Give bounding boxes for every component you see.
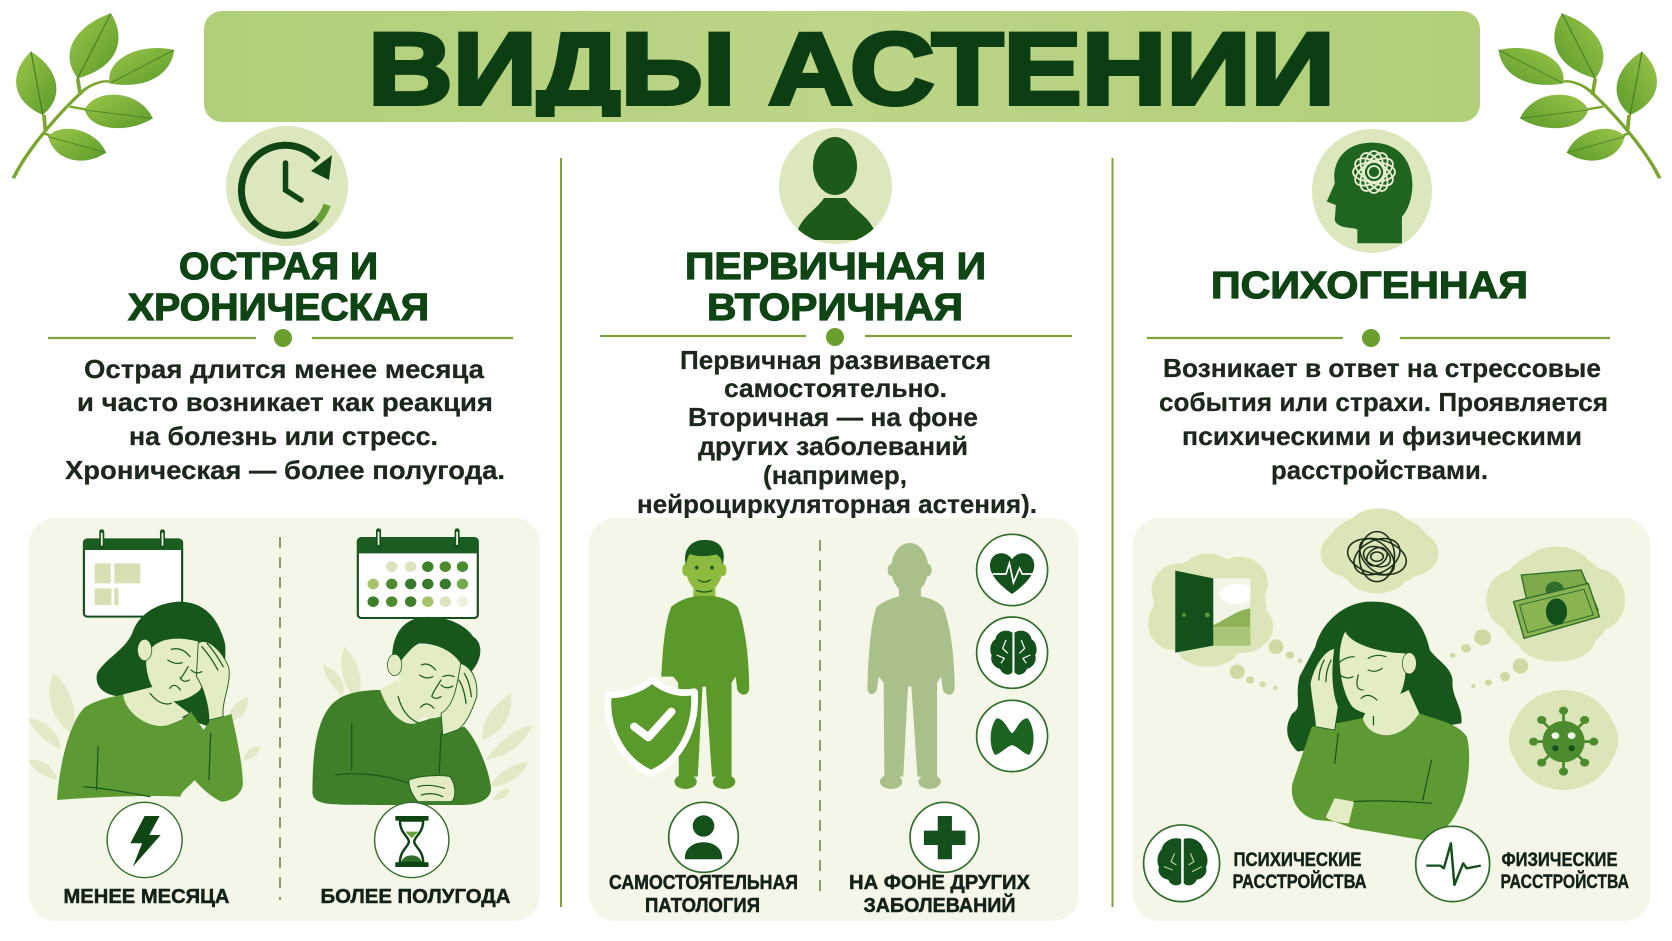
decorative branch: right [1499,13,1660,178]
icon: clock with arrow [226,126,348,246]
icon: hourglass [375,802,449,878]
title banner [204,11,1480,126]
description text: (например, [763,460,907,490]
panel: psychogenic illustration [1133,508,1650,921]
label: mental disorders [1232,850,1367,893]
label: physical disorders: РАССТРОЙСТВА [1500,871,1629,893]
heading: ОСТРАЯ И [179,246,378,288]
description text: Хроническая — более полугода. [65,455,505,485]
column 1: acute and chronic [48,126,513,485]
column 2: primary and secondary [600,128,1072,519]
heading [685,246,986,329]
label: on the background of other diseases [849,872,1031,917]
icon: brain [1144,825,1220,902]
figure: man with comorbidities [867,543,955,789]
icon: pulse line [1416,826,1490,902]
label: mental disorders: РАССТРОЙСТВА [1232,871,1367,893]
icon: thyroid [977,700,1048,772]
panel: acute and chronic illustrations [29,518,540,921]
figure: tired man [312,617,491,805]
divider with dot [600,328,1072,346]
label: independent pathology: САМОСТОЯТЕЛЬНАЯ [609,872,798,894]
thought cloud: open door [1148,553,1273,667]
icon: person [669,802,738,872]
panel: primary and secondary illustrations [589,518,1079,921]
icon: shield with check [608,680,695,773]
heading: ВТОРИЧНАЯ [707,287,963,329]
divider with dot [1147,329,1610,347]
heading: ХРОНИЧЕСКАЯ [128,287,429,329]
description text: на болезнь или стресс. [129,421,438,451]
thought bubbles dots [1230,629,1528,690]
icon: brain [977,617,1048,688]
description text [637,345,1037,519]
thought cloud: money [1486,547,1625,662]
label: independent pathology [609,872,798,917]
description text: Первичная развивается [680,345,991,375]
description text: и часто возникает как реакция [77,387,493,417]
icon: heart [977,534,1048,606]
description text [1159,353,1608,485]
column 3: psychogenic [1147,129,1610,485]
description text: Возникает в ответ на стрессовые [1163,353,1601,383]
description text: нейроциркуляторная астения). [637,489,1037,519]
calendar: long [357,531,479,618]
description text: других заболеваний [698,431,968,461]
background leaves [29,647,532,800]
figure: woman with headache [57,602,243,802]
label: mental disorders: ПСИХИЧЕСКИЕ [1234,850,1362,871]
figure: healthy man [661,540,749,789]
label: on the background of other diseases: ЗАБОЛЕВАНИЙ [864,893,1016,917]
thought cloud: virus [1509,690,1618,790]
label: less than a month: МЕНЕЕ МЕСЯЦА [64,886,230,908]
icon: medical cross [910,802,979,872]
title: ВИДЫ АСТЕНИИ [368,12,1335,126]
icon: head with tangled thoughts [1312,129,1432,253]
description text: Вторичная — на фоне [688,402,978,432]
column dividers [561,158,1112,907]
description text: события или страхи. Проявляется [1159,387,1608,417]
icon: person silhouette [779,128,892,244]
divider with dot [48,329,513,347]
description text: психическими и физическими [1182,421,1582,451]
calendar: short [83,532,182,617]
label: physical disorders: ФИЗИЧЕСКИЕ [1502,850,1618,871]
thought cloud: tangled thoughts [1321,508,1439,593]
description text: Острая длится менее месяца [84,354,485,384]
label: on the background of other diseases: НА ФОНЕ ДРУГИХ [849,872,1031,894]
label: more than half a year: БОЛЕЕ ПОЛУГОДА [320,886,510,908]
description text: самостоятельно. [724,373,947,403]
description text [65,354,505,485]
heading: ПЕРВИЧНАЯ И [685,246,986,288]
heading: ПСИХОГЕННАЯ [1211,265,1528,307]
icon: lightning bolt [107,802,182,878]
heading [128,246,429,329]
label: independent pathology: ПАТОЛОГИЯ [645,895,760,917]
description text: расстройствами. [1271,455,1488,485]
decorative branch: left [13,13,174,178]
label: physical disorders [1500,850,1629,893]
figure: anxious woman [1287,602,1469,840]
